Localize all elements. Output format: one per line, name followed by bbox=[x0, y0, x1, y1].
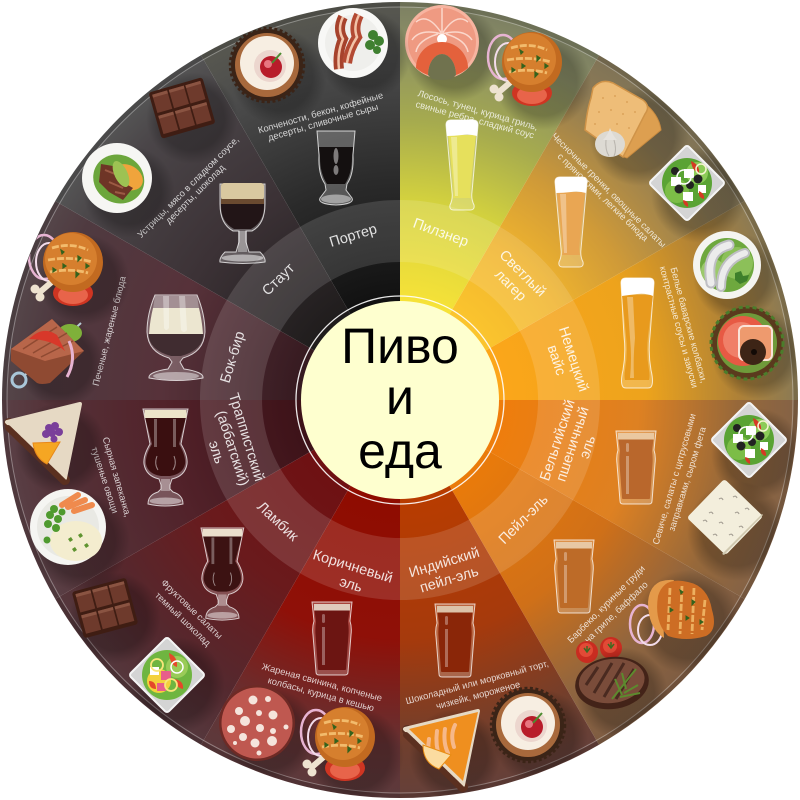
pairing text: контрастные соусы и закуски bbox=[658, 265, 700, 389]
icon: greek salad bbox=[711, 402, 800, 500]
panel: Стаут bbox=[82, 72, 298, 299]
icon: grilled chicken bbox=[488, 32, 591, 130]
label: Траппистский (аббатский) эль: (аббатский) bbox=[212, 409, 252, 488]
icon: grilled chicken bbox=[301, 707, 404, 800]
label: Ламбик: Ламбик bbox=[253, 499, 302, 545]
icon: salmon steak bbox=[405, 5, 502, 102]
pairing text: свиные ребра, сладкий соус bbox=[415, 99, 536, 140]
glass: портер bbox=[317, 131, 355, 205]
glass: индийский пейл-эль bbox=[435, 604, 475, 677]
label: Коричневый эль: эль bbox=[337, 574, 364, 596]
label: Траппистский (аббатский) эль: эль bbox=[205, 439, 227, 466]
wedge: Пейл-эль bbox=[400, 400, 745, 745]
panel: Светлый лагер bbox=[491, 81, 747, 305]
pairing text: Чесночные гренки, овощные салаты bbox=[550, 131, 668, 250]
center hub bbox=[296, 296, 504, 504]
icon: cheesecake slice bbox=[7, 402, 107, 494]
pairing text: с пряностями, легкие блюда bbox=[555, 151, 651, 244]
icon: tomatoes bbox=[576, 637, 622, 663]
label: Портер: Портер bbox=[328, 221, 379, 251]
panel: Траппистский эль bbox=[7, 391, 267, 591]
wedge: Стаут bbox=[55, 55, 400, 400]
wedge: Индийский пейл-эль bbox=[400, 400, 599, 798]
panel: Портер bbox=[230, 8, 411, 251]
label: Пилзнер: Пилзнер bbox=[411, 216, 471, 250]
glass: коричневый эль bbox=[312, 602, 352, 675]
pairing text: Сырная запеканка, bbox=[101, 436, 133, 518]
wedge: Коричневый эль bbox=[201, 400, 400, 798]
icon: greek salad bbox=[649, 145, 747, 243]
icon: meat on a plate bbox=[82, 143, 175, 238]
pairing text: Печеные, жареные блюда bbox=[91, 274, 128, 387]
wedge: Траппистский эль bbox=[2, 400, 400, 599]
glass: бок-бир bbox=[147, 295, 205, 380]
pairing text: Белые баварские колбаски, bbox=[668, 266, 709, 384]
icon: cherry cupcake bbox=[230, 28, 327, 125]
pairing text: тушеные овощи bbox=[89, 446, 120, 515]
pairing text: Барбекю, куриные груди bbox=[565, 563, 647, 645]
icon: kebab bbox=[11, 319, 105, 407]
icon: toast and garlic bbox=[585, 81, 689, 186]
icon: bacon on a plate bbox=[318, 8, 411, 101]
label: Стаут: Стаут bbox=[259, 260, 298, 299]
pairing text: заправками, сыром фета bbox=[667, 425, 708, 532]
icon: carrot cake bbox=[405, 709, 501, 800]
pairing text: темный шоколад bbox=[153, 590, 213, 649]
pairing text: колбасы, курица в кешью bbox=[267, 675, 375, 713]
wedge: Бок-бир bbox=[2, 201, 400, 400]
icon: grilled chicken breast bbox=[628, 574, 734, 670]
label: Немецкий вайс: вайс bbox=[544, 343, 568, 378]
panel: Бельгийский пшеничный эль bbox=[537, 398, 800, 581]
panel: Пейл-эль bbox=[496, 492, 740, 739]
wedge: Бельгийский пшеничный эль bbox=[400, 400, 798, 599]
pairing text: Жареная свинина, копченые bbox=[261, 661, 383, 703]
title: Пиво и еда: Пиво bbox=[341, 318, 459, 374]
icon: mash with vegetables bbox=[30, 489, 130, 591]
name band ring bbox=[200, 200, 600, 600]
pairing text: Шоколадный или морковный торт, bbox=[405, 658, 550, 706]
icon: salami bbox=[219, 685, 317, 783]
pairing text: на гриле, баффало bbox=[583, 579, 650, 645]
panel: Бок-бир bbox=[11, 232, 248, 407]
glass: светлый лагер bbox=[555, 177, 587, 267]
label: Бельгийский пшеничный эль: пшеничный bbox=[553, 405, 593, 484]
icon: salmon canape bbox=[711, 307, 800, 399]
icon: sausages on a plate bbox=[693, 231, 777, 316]
glass: пилзнер bbox=[446, 120, 478, 210]
label: Индийский пейл-эль: Индийский bbox=[407, 545, 482, 581]
panel: Немецкий вайс bbox=[544, 231, 800, 399]
panel: Пилзнер bbox=[405, 5, 591, 250]
label: Бельгийский пшеничный эль bbox=[540, 400, 595, 482]
panel: Коричневый эль bbox=[219, 547, 404, 800]
label: Бельгийский пшеничный эль: Бельгийский bbox=[537, 398, 579, 483]
pairing text: Фруктовые салаты bbox=[159, 578, 225, 641]
label: Траппистский (аббатский) эль: Траппистский bbox=[225, 391, 267, 483]
label: Коричневый эль: Коричневый bbox=[311, 547, 394, 587]
pairing text: Копчености, бекон, кофейные bbox=[257, 90, 384, 135]
pairing text: Лосось, тунец, курица гриль, bbox=[417, 88, 539, 132]
wedge: Светлый лагер bbox=[400, 55, 745, 400]
label: Бок-бир: Бок-бир bbox=[218, 330, 248, 385]
label: Немецкий вайс: Немецкий bbox=[555, 325, 591, 394]
glass: бельгийский эль bbox=[616, 431, 656, 504]
pairing text: Севиче, салаты с цитрусовыми bbox=[651, 412, 698, 546]
glass: вайс bbox=[621, 278, 654, 388]
pairing text: чизкейк, мороженое bbox=[435, 679, 521, 711]
icon: cherry cupcake bbox=[490, 686, 583, 776]
wedge: Ламбик bbox=[55, 400, 400, 745]
panel: Индийский пейл-эль bbox=[405, 545, 588, 800]
title: Пиво и еда bbox=[341, 318, 459, 479]
label: Траппистский (аббатский) эль bbox=[205, 391, 267, 488]
glass: ламбик bbox=[201, 528, 244, 620]
panel: Ламбик bbox=[69, 499, 302, 733]
pairing text: Устрицы, мясо в сладком соусе, bbox=[136, 135, 241, 240]
wedge: Портер bbox=[201, 2, 400, 400]
wedge: Немецкий вайс bbox=[400, 201, 798, 400]
icon: fruit salad bbox=[129, 637, 225, 733]
label: Светлый лагер: лагер bbox=[491, 267, 529, 305]
icon: chocolate bbox=[69, 572, 161, 664]
glass: траппистский эль bbox=[143, 409, 188, 506]
wedge: Пилзнер bbox=[400, 2, 599, 400]
pairing text: десерты, шоколад bbox=[164, 162, 227, 226]
label: Бельгийский пшеничный эль: эль bbox=[577, 434, 599, 461]
glass: пейл-эль bbox=[554, 540, 594, 613]
title: Пиво и еда: и bbox=[386, 369, 414, 425]
icon: grilled chicken bbox=[29, 232, 130, 326]
label: Пейл-эль: Пейл-эль bbox=[496, 492, 552, 548]
icon: steak bbox=[575, 650, 665, 734]
title: Пиво и еда: еда bbox=[358, 423, 442, 479]
label: Светлый лагер: Светлый bbox=[496, 247, 549, 300]
label: Индийский пейл-эль: пейл-эль bbox=[418, 564, 481, 597]
icon: chocolate bbox=[146, 72, 238, 164]
icon: feta cheese bbox=[688, 480, 780, 577]
glass: стаут bbox=[220, 183, 265, 264]
pairing text: десерты, сливочные сыры bbox=[267, 102, 380, 143]
